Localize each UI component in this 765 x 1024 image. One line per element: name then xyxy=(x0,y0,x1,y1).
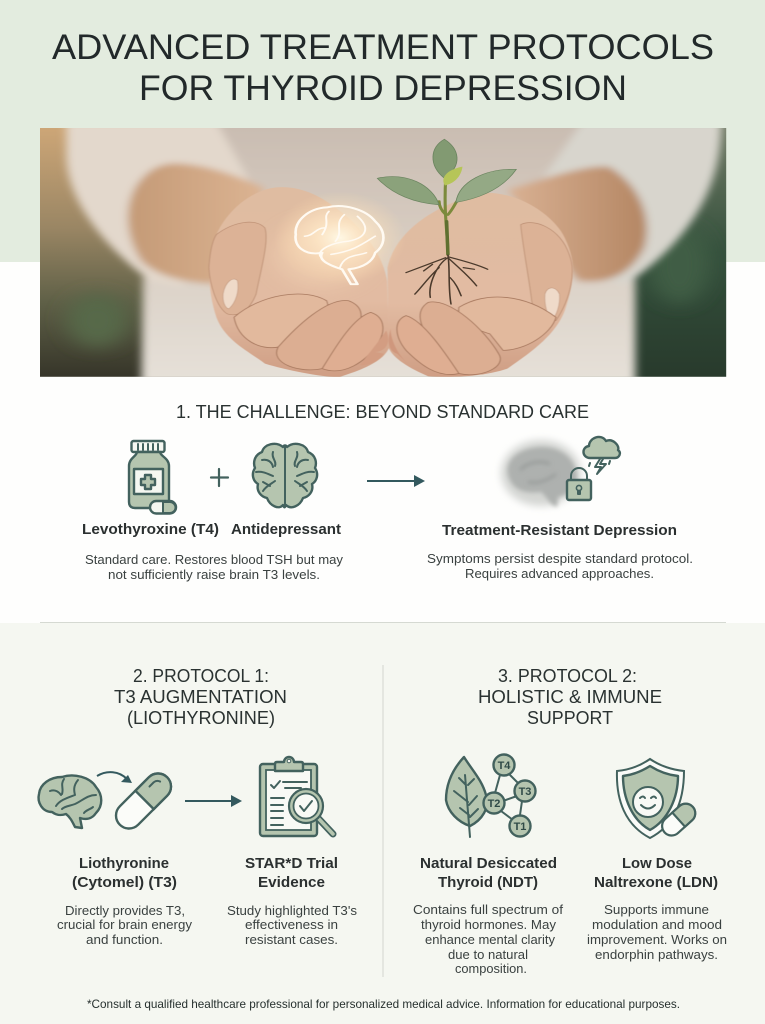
text: STAR*D: Study highlighted T3's xyxy=(227,903,357,918)
right thumb xyxy=(521,223,572,321)
label: NDT: Thyroid (NDT) xyxy=(438,874,538,891)
icon: shield with smile and capsule xyxy=(617,759,699,839)
icon: plus xyxy=(211,469,228,486)
section 2 heading: 2. PROTOCOL 1: xyxy=(133,666,269,686)
title xyxy=(52,28,714,108)
icon: side brain with arrow to capsule xyxy=(39,768,176,834)
text: STAR*D xyxy=(227,903,357,947)
icon: leaf and hormone molecule: T3 xyxy=(519,786,531,798)
label: NDT: Natural Desiccated xyxy=(420,855,557,872)
icon: leaf and hormone molecule: T1 xyxy=(514,821,526,833)
label: liothyronine: (Cytomel) (T3) xyxy=(72,874,177,891)
icon: leaf and hormone molecule xyxy=(446,754,536,837)
label: LDN xyxy=(594,855,718,891)
section 2 heading: (LIOTHYRONINE) xyxy=(127,708,275,728)
text: NDT: composition. xyxy=(455,961,527,976)
text: standard care xyxy=(85,552,343,582)
text: LDN: improvement. Works on xyxy=(587,932,727,947)
label: STAR*D xyxy=(245,855,338,891)
text: symptoms persist xyxy=(427,551,693,581)
icon: clipboard with magnifier xyxy=(260,757,333,836)
text: NDT: due to natural xyxy=(448,947,528,962)
text: liothyronine: Directly provides T3, xyxy=(65,903,185,918)
label: levothyroxine: Levothyroxine (T4) xyxy=(82,521,219,538)
label: antidepressant: Antidepressant xyxy=(231,521,341,538)
left fingers xyxy=(234,294,328,348)
text: NDT xyxy=(413,902,563,976)
label: liothyronine xyxy=(72,855,177,891)
label: treatment-resistant depression: Treatment-Resistant Depression xyxy=(442,522,677,539)
footer disclaimer: *Consult a qualified healthcare professional for personalized medical advice. Information for educational purposes. xyxy=(87,997,680,1011)
vertical divider xyxy=(382,665,384,977)
icon: leaf and hormone molecule: T4 xyxy=(498,760,511,772)
section 2 heading: T3 AUGMENTATION xyxy=(114,687,287,707)
section 2 heading xyxy=(114,666,287,728)
text: LDN: Supports immune xyxy=(604,902,709,917)
left thumb xyxy=(209,222,266,315)
text: liothyronine: crucial for brain energy xyxy=(57,917,193,932)
section 3 heading: 3. PROTOCOL 2: xyxy=(498,666,637,686)
text: NDT: thyroid hormones. May xyxy=(421,917,556,932)
section 3 heading xyxy=(478,666,662,728)
label: NDT xyxy=(420,855,557,891)
label: liothyronine: Liothyronine xyxy=(79,855,169,872)
section 3 heading: HOLISTIC & IMMUNE xyxy=(478,687,662,707)
title: FOR THYROID DEPRESSION xyxy=(139,69,627,108)
icon: medicine bottle xyxy=(129,441,176,514)
glowing brain outline xyxy=(274,192,406,284)
text: symptoms persist: Requires advanced approaches. xyxy=(465,566,654,581)
text: STAR*D: resistant cases. xyxy=(245,932,338,947)
text: NDT: enhance mental clarity xyxy=(425,932,555,947)
text: STAR*D: effectiveness in xyxy=(245,917,338,932)
right fingers xyxy=(459,297,556,350)
text: LDN xyxy=(587,902,727,962)
text: standard care: Standard care. Restores blood TSH but may xyxy=(85,552,343,567)
label: LDN: Low Dose xyxy=(622,855,692,872)
section 3 heading: SUPPORT xyxy=(527,708,613,728)
label: STAR*D: Evidence xyxy=(258,874,325,891)
icon: foggy brain, storm cloud and lock xyxy=(501,437,620,507)
text: NDT: Contains full spectrum of xyxy=(413,902,563,917)
arrow xyxy=(367,475,425,487)
text: LDN: modulation and mood xyxy=(592,917,722,932)
text: symptoms persist: Symptoms persist despite standard protocol. xyxy=(427,551,693,566)
text: LDN: endorphin pathways. xyxy=(595,947,718,962)
seedling with roots xyxy=(377,139,516,304)
text: liothyronine: and function. xyxy=(86,932,163,947)
text: standard care: not sufficiently raise brain T3 levels. xyxy=(108,567,320,582)
section 1 heading: 1. THE CHALLENGE: BEYOND STANDARD CARE xyxy=(176,402,589,422)
title: ADVANCED TREATMENT PROTOCOLS xyxy=(52,28,714,67)
icon: leaf and hormone molecule: T2 xyxy=(488,798,500,810)
label: LDN: Naltrexone (LDN) xyxy=(594,874,718,891)
hero photo: cupped hands holding a brain and a seedling xyxy=(40,122,727,383)
arrow xyxy=(185,795,242,807)
text: liothyronine xyxy=(57,903,193,947)
label: STAR*D: STAR*D Trial xyxy=(245,855,338,872)
icon: brain (antidepressant) xyxy=(253,444,317,507)
